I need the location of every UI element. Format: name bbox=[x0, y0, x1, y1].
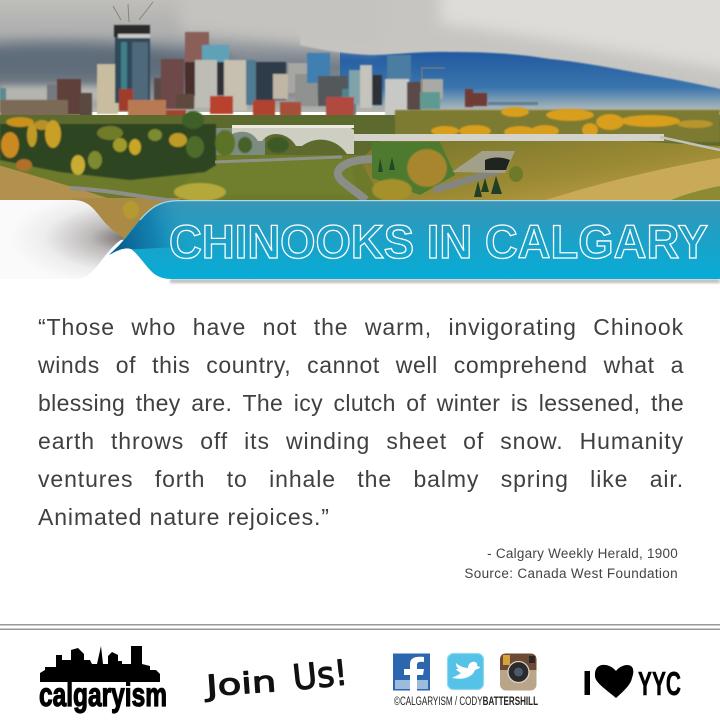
left group of autumn trees bbox=[0, 111, 289, 201]
hero photo: Calgary skyline panorama bbox=[0, 0, 720, 240]
i love yyc: YYC bbox=[638, 665, 681, 702]
join us text bbox=[202, 653, 350, 703]
logo: calgaryism: calgaryism bbox=[39, 676, 167, 713]
quote text block: blessing they are. The icy clutch of winter is lessened, the bbox=[38, 390, 684, 416]
attribution: - Calgary Weekly Herald, 1900 bbox=[487, 546, 678, 561]
quote text block bbox=[38, 314, 684, 530]
autumn tree line and far river valley bbox=[0, 107, 720, 165]
quote text block: earth throws off its winding sheet of snow. Humanity bbox=[38, 428, 684, 454]
hillside and grass bbox=[0, 141, 720, 240]
title: CHINOOKS IN CALGARY bbox=[169, 215, 708, 268]
quote text block: ventures forth to inhale the balmy spring like air. bbox=[38, 466, 684, 492]
footer bbox=[0, 624, 720, 714]
quote text block: Animated nature rejoices.” bbox=[38, 504, 330, 530]
ribbon twist shading bbox=[109, 200, 190, 255]
sky and clouds bbox=[0, 0, 720, 112]
blue ribbon band bbox=[109, 200, 720, 279]
attribution bbox=[464, 546, 678, 581]
quote text block: winds of this country, cannot well comprehend what a bbox=[38, 352, 684, 378]
attribution: Source: Canada West Foundation bbox=[464, 566, 678, 581]
credit line: ©CALGARYISM / CODYBATTERSHILL bbox=[394, 696, 538, 708]
join us text: Us! bbox=[291, 653, 350, 699]
title banner: twisted ribbon bbox=[0, 200, 720, 284]
tower crane details bbox=[113, 2, 445, 95]
quote text block: “Those who have not the warm, invigorating Chinook bbox=[38, 314, 684, 340]
white ribbon fold bbox=[0, 200, 124, 279]
ribbon top highlight bbox=[140, 201, 720, 220]
icon: facebook bbox=[393, 654, 430, 691]
bridge and roads bbox=[70, 125, 720, 201]
i love yyc bbox=[584, 665, 681, 702]
icon: twitter bbox=[448, 654, 484, 690]
skyline buildings bbox=[0, 25, 538, 126]
icon: instagram bbox=[500, 654, 536, 690]
logo: calgaryism bbox=[39, 646, 167, 713]
footer rules bbox=[0, 624, 720, 630]
ribbon drop shadow bbox=[170, 279, 720, 283]
join us text: Join bbox=[202, 664, 277, 703]
